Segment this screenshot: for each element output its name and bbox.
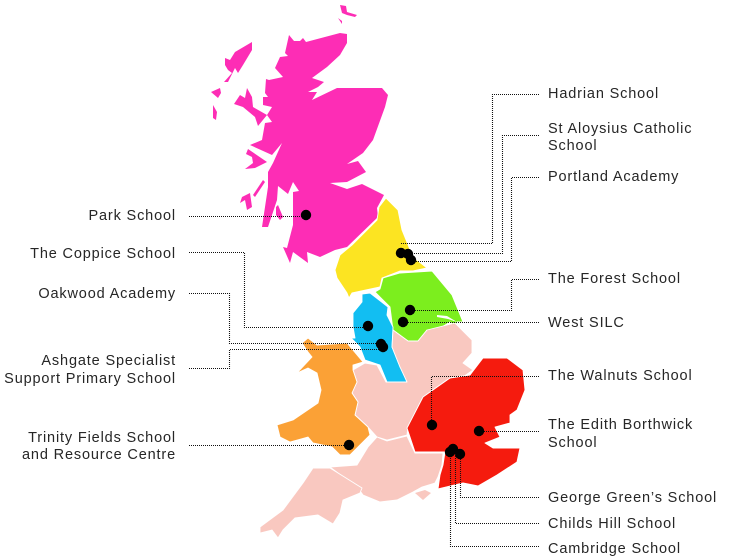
school: Portland Academy: Portland Academy bbox=[548, 169, 679, 185]
school: The Forest School bbox=[405, 271, 681, 315]
school: Cambridge School: Cambridge School bbox=[548, 541, 681, 557]
school: The Forest School: The Forest School bbox=[548, 271, 681, 287]
region: North East bbox=[335, 198, 427, 298]
school: Trinity Fields School and Resource Centre: Trinity Fields School bbox=[28, 430, 176, 446]
school: St Aloysius Catholic School: School bbox=[548, 138, 597, 154]
inlet: Humber bbox=[437, 315, 457, 322]
school: Ashgate Specialist Support Primary School: Ashgate Specialist bbox=[41, 353, 176, 369]
school: Childs Hill School: Childs Hill School bbox=[548, 516, 676, 532]
school: The Walnuts School: The Walnuts School bbox=[548, 368, 693, 384]
region: Scotland bbox=[211, 5, 388, 263]
school: The Edith Borthwick School: School bbox=[548, 435, 597, 451]
school: Trinity Fields School and Resource Centre bbox=[22, 430, 354, 463]
school: Portland Academy bbox=[406, 169, 679, 265]
school: Park School bbox=[88, 208, 311, 224]
school: George Green's School: George Green’s School bbox=[548, 490, 717, 506]
region: South West bbox=[260, 468, 362, 538]
region: East and South East bbox=[407, 358, 525, 489]
school: Oakwood Academy bbox=[38, 286, 386, 349]
region: Midlands bbox=[352, 323, 473, 440]
school: Trinity Fields School and Resource Centre: and Resource Centre bbox=[22, 447, 176, 463]
region: North West bbox=[351, 293, 407, 382]
school: St Aloysius Catholic School bbox=[403, 121, 692, 259]
school: Ashgate Specialist Support Primary School: Support Primary School bbox=[4, 371, 176, 387]
school: St Aloysius Catholic School: St Aloysius Catholic bbox=[548, 121, 692, 137]
school: George Green's School bbox=[455, 449, 717, 506]
map of Great Britain regions bbox=[211, 5, 525, 538]
region: South bbox=[330, 436, 443, 502]
school: The Walnuts School bbox=[427, 368, 693, 430]
school: Cambridge School bbox=[445, 447, 681, 557]
school: Hadrian School bbox=[396, 86, 659, 258]
region: Yorkshire bbox=[375, 271, 463, 341]
school: Childs Hill School bbox=[448, 444, 676, 532]
school: The Coppice School bbox=[30, 246, 373, 331]
region: Wales bbox=[277, 338, 370, 455]
school: West SILC: West SILC bbox=[548, 315, 625, 331]
school: Ashgate Specialist Support Primary School bbox=[4, 342, 388, 387]
school: The Edith Borthwick School bbox=[474, 417, 693, 451]
school: Hadrian School: Hadrian School bbox=[548, 86, 659, 102]
school: West SILC bbox=[398, 315, 625, 331]
school: The Coppice School: The Coppice School bbox=[30, 246, 176, 262]
school: Oakwood Academy: Oakwood Academy bbox=[38, 286, 176, 302]
school: The Edith Borthwick School: The Edith Borthwick bbox=[548, 417, 693, 433]
school: Park School: Park School bbox=[88, 208, 176, 224]
region: Isle of Wight bbox=[415, 490, 431, 500]
